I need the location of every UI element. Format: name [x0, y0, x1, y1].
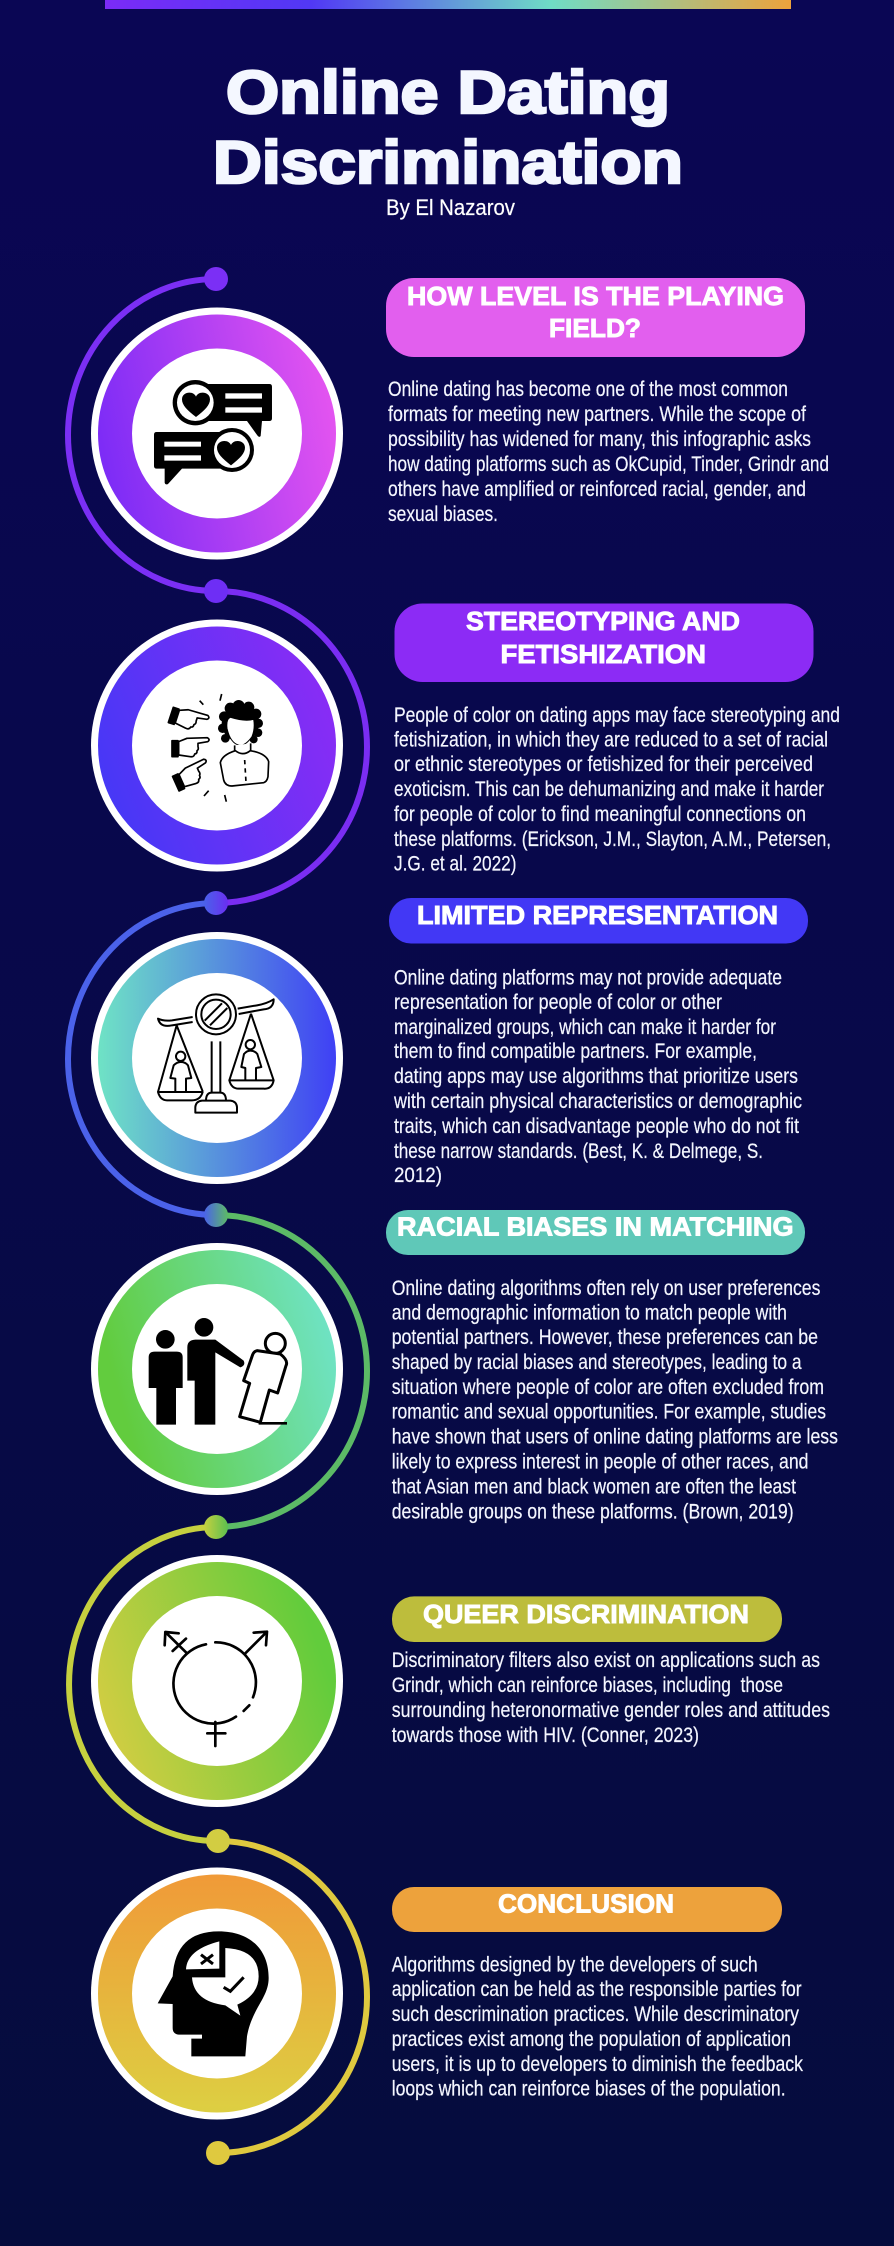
connector arc 2: [216, 591, 367, 903]
node dot 2: [204, 579, 228, 603]
body text 4: situation where people of color are often excluded from: [392, 1376, 824, 1399]
medallion 3: [91, 932, 343, 1184]
icon: chat bubbles with hearts: [154, 380, 272, 484]
medallion 1: [91, 308, 343, 560]
body text 3: Online dating platforms may not provide adequate: [394, 966, 782, 989]
body text 4: and demographic information to match people with: [392, 1302, 787, 1325]
body text 5: towards those with HIV. (Conner, 2023): [392, 1724, 699, 1747]
panel: stereotyping and fetishization: [91, 604, 840, 875]
body text 5: surrounding heteronormative gender roles and attitudes: [392, 1699, 830, 1722]
medallion 2: [91, 620, 343, 872]
connector arc 5: [69, 1527, 218, 1841]
body text 1: sexual biases.: [388, 503, 498, 526]
panel: conclusion: [91, 1868, 803, 2120]
icon: hands pointing at a person: [168, 694, 269, 802]
medallion 6: [91, 1868, 343, 2120]
node dot 5: [204, 1515, 228, 1539]
body text 4: Online dating algorithms often rely on user preferences: [392, 1277, 820, 1300]
body text 3: marginalized groups, which can make it harder for: [394, 1016, 776, 1039]
node dot 3: [204, 891, 228, 915]
connector arc 1: [68, 279, 216, 591]
body text 3: them to find compatible partners. For example,: [394, 1040, 757, 1063]
heading pill 4: [386, 1210, 805, 1255]
body text 1: [388, 378, 829, 526]
heading pill 6: [392, 1887, 782, 1932]
body text 2: J.G. et al. 2022): [394, 852, 516, 875]
body text 5: Discriminatory filters also exist on applications such as: [392, 1649, 820, 1672]
title: [213, 59, 683, 196]
body text 6: such descrimination practices. While descriminatory: [392, 2003, 799, 2026]
body text 3: traits, which can disadvantage people who do not fit: [394, 1115, 799, 1138]
body text 5: [392, 1649, 830, 1747]
title: Online Dating: [226, 59, 670, 126]
connector arc 4: [216, 1215, 367, 1527]
panel: queer discrimination: [91, 1555, 830, 1807]
byline: By El Nazarov: [386, 195, 515, 220]
heading pill 5: [392, 1596, 782, 1642]
heading pill 6: CONCLUSION: [498, 1888, 674, 1918]
node dot 7: [206, 2141, 230, 2165]
body text 6: application can be held as the responsible parties for: [392, 1978, 802, 2001]
heading pill 4: RACIAL BIASES IN MATCHING: [397, 1211, 794, 1241]
node dot 1: [204, 267, 228, 291]
body text 3: dating apps may use algorithms that prioritize users: [394, 1065, 798, 1088]
body text 2: [394, 704, 840, 875]
body text 6: [392, 1954, 803, 2101]
panel: limited representation: [91, 898, 808, 1187]
body text 3: with certain physical characteristics or demographic: [393, 1090, 802, 1113]
body text 3: [393, 966, 802, 1187]
body text 4: desirable groups on these platforms. (Brown, 2019): [392, 1501, 794, 1524]
icon: transgender symbol: [165, 1632, 267, 1746]
body text 4: [392, 1277, 838, 1524]
icon: people excluding a person: [149, 1318, 287, 1425]
panel: how level is the playing field: [91, 278, 829, 560]
connector arc 6: [218, 1841, 367, 2153]
heading pill 2: STEREOTYPING AND: [466, 606, 740, 636]
body text 6: loops which can reinforce biases of the population.: [392, 2078, 786, 2101]
body text 1: possibility has widened for many, this infographic asks: [388, 428, 811, 451]
node dot 6: [206, 1829, 230, 1853]
heading pill 2: FETISHIZATION: [500, 639, 706, 669]
node dot 4: [204, 1203, 228, 1227]
connector arc 3: [68, 903, 216, 1215]
heading pill 1: HOW LEVEL IS THE PLAYING: [407, 281, 784, 311]
body text 5: Grindr, which can reinforce biases, including those: [392, 1674, 783, 1697]
body text 4: that Asian men and black women are often the least: [392, 1476, 796, 1499]
body text 6: users, it is up to developers to diminish the feedback: [392, 2053, 803, 2076]
body text 3: 2012): [394, 1164, 442, 1187]
body text 6: Algorithms designed by the developers of such: [392, 1954, 758, 1977]
heading pill 1: FIELD?: [549, 313, 641, 343]
heading pill 1: [386, 278, 805, 357]
medallion 5: [91, 1555, 343, 1807]
heading pill 5: QUEER DISCRIMINATION: [423, 1599, 749, 1629]
body text 1: others have amplified or reinforced racial, gender, and: [388, 478, 806, 501]
body text 4: likely to express interest in people of other races, and: [392, 1451, 808, 1474]
body text 2: or ethnic stereotypes or fetishized for their perceived: [394, 753, 813, 776]
heading pill 3: [389, 898, 808, 944]
icon: head with thought bubble: [158, 1931, 269, 2056]
title: Discrimination: [213, 129, 683, 196]
body text 4: potential partners. However, these preferences can be: [392, 1326, 818, 1349]
body text 3: representation for people of color or other: [394, 991, 722, 1014]
body text 3: these narrow standards. (Best, K. & Delmege, S.: [394, 1140, 763, 1163]
body text 1: formats for meeting new partners. While the scope of: [388, 403, 806, 426]
top gradient bar: [105, 0, 791, 9]
icon: unbalanced scale: [158, 994, 274, 1113]
body text 2: for people of color to find meaningful connections on: [394, 803, 806, 826]
heading pill 3: LIMITED REPRESENTATION: [417, 900, 778, 930]
heading pill 2: [394, 604, 814, 682]
panel: racial biases in matching: [91, 1210, 838, 1524]
medallion 4: [91, 1243, 343, 1495]
body text 1: Online dating has become one of the most common: [388, 378, 788, 401]
body text 6: practices exist among the population of application: [392, 2028, 791, 2051]
body text 4: shaped by racial biases and stereotypes, leading to a: [392, 1351, 802, 1374]
